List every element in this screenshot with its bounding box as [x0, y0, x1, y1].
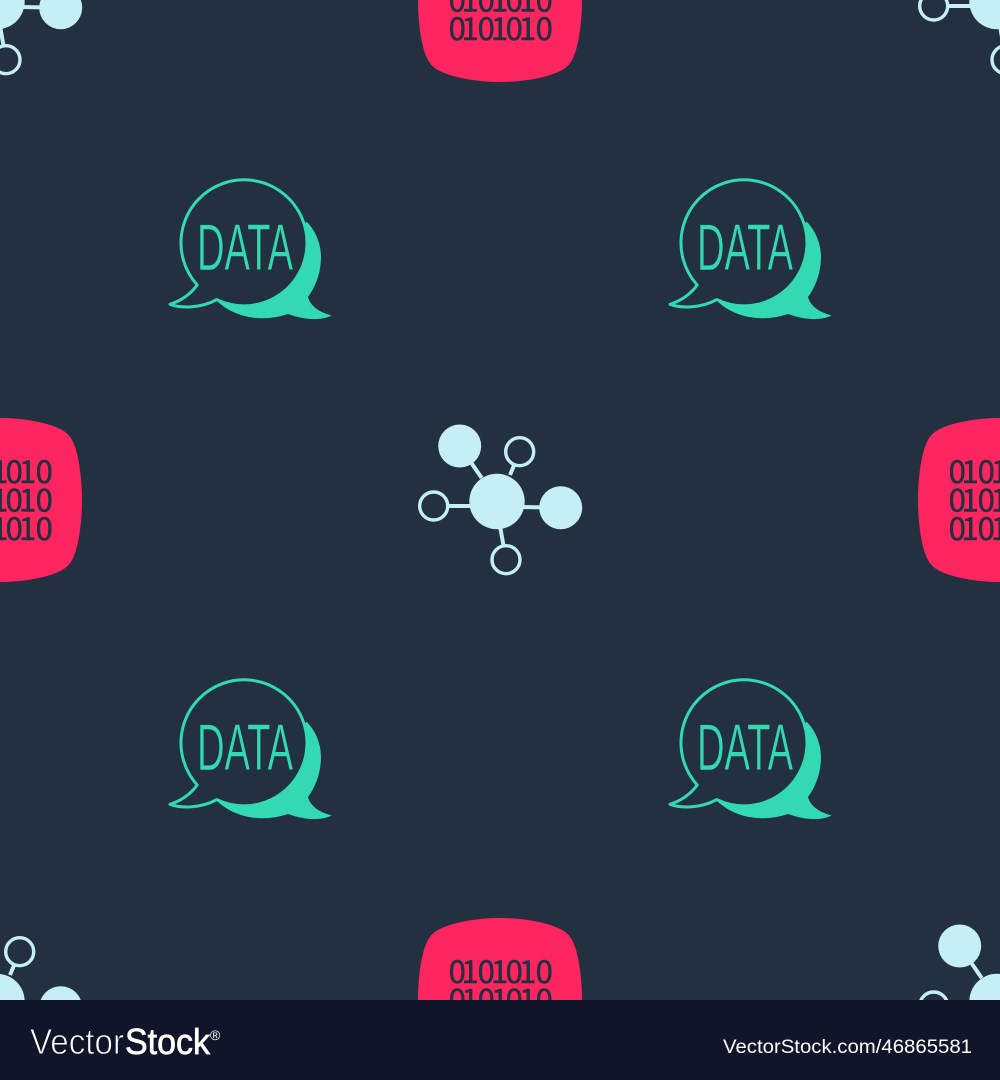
icon: binary pad right	[918, 418, 1000, 582]
footer logo: ®	[210, 1027, 221, 1043]
icon: network bottom right	[920, 924, 1000, 1074]
icon: network bottom left	[0, 924, 82, 1074]
icon: network center	[420, 424, 582, 574]
footer logo: Vector	[30, 1021, 124, 1062]
icon: binary pad bottom: 0101010	[449, 976, 553, 1020]
icon: data speech bubble bottom right	[670, 680, 832, 819]
footer image id: VectorStock.com/46865581	[723, 1037, 972, 1058]
icon: binary pad bottom: 0101010	[449, 1004, 553, 1049]
icon: data speech bubble top left	[170, 180, 332, 319]
icon: network top left	[0, 0, 82, 74]
footer logo	[30, 1021, 221, 1062]
icon: data speech bubble bottom left	[170, 680, 332, 819]
icon: data speech bubble bottom right: DATA	[697, 710, 793, 784]
icon: binary pad left	[0, 418, 82, 582]
footer bar	[0, 1000, 1000, 1080]
icon: binary pad bottom	[418, 918, 582, 1080]
icon: binary pad bottom: 0101010	[449, 947, 553, 992]
icon: data speech bubble top right: DATA	[697, 210, 793, 284]
icon: data speech bubble top left: DATA	[197, 210, 293, 284]
icon: binary pad top	[418, 0, 582, 82]
icon: data speech bubble bottom left: DATA	[197, 710, 293, 784]
icon: network top right	[920, 0, 1000, 74]
footer logo: Stock	[125, 1021, 211, 1062]
icon: binary pad top: 0101010	[449, 4, 553, 49]
icon: data speech bubble top right	[670, 180, 832, 319]
